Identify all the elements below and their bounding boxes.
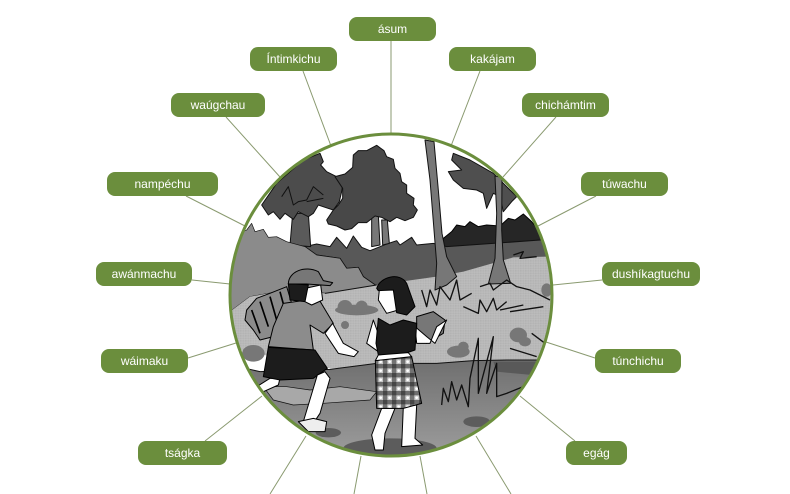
label: ásum xyxy=(349,17,436,41)
label: túnchichu: túnchichu xyxy=(612,354,664,368)
label: ásum: ásum xyxy=(378,22,407,36)
backpack bundle xyxy=(245,287,292,340)
label: waúgchau xyxy=(171,93,265,117)
circle outline xyxy=(230,134,552,456)
hair xyxy=(288,283,308,302)
connector lines xyxy=(186,41,602,494)
dark grass band xyxy=(305,236,550,288)
label: nampéchu xyxy=(107,172,218,196)
label: waúgchau: waúgchau xyxy=(191,98,245,112)
label: Íntimkichu: Íntimkichu xyxy=(266,52,321,66)
waistband xyxy=(375,353,412,361)
face xyxy=(305,285,323,305)
label: dushíkagtuchu xyxy=(602,262,700,286)
palm trunk xyxy=(488,176,511,284)
speckled ground xyxy=(232,256,550,368)
hill xyxy=(232,223,374,310)
label: túwachu: túwachu xyxy=(602,177,647,191)
left tree trunk xyxy=(290,213,311,247)
label: tságka: tságka xyxy=(165,446,200,460)
label: tságka xyxy=(138,441,227,465)
back leg xyxy=(257,378,280,392)
label: kakájam xyxy=(449,47,536,71)
shirt xyxy=(268,298,333,350)
hair xyxy=(377,277,415,315)
skirt xyxy=(375,357,422,408)
shorts xyxy=(263,347,327,380)
face xyxy=(378,290,396,314)
reeds xyxy=(442,333,545,407)
label: egág xyxy=(566,441,627,465)
label: nampéchu: nampéchu xyxy=(134,177,191,191)
label: chichámtim xyxy=(522,93,609,117)
path shadows xyxy=(316,416,490,458)
left tree xyxy=(262,153,343,219)
label: dushíkagtuchu: dushíkagtuchu xyxy=(612,267,690,281)
label: wáimaku: wáimaku xyxy=(121,354,168,368)
far bushes xyxy=(443,214,540,246)
arms xyxy=(367,320,447,352)
man xyxy=(245,269,358,432)
label: túnchichu xyxy=(595,349,681,373)
label: kakájam: kakájam xyxy=(470,52,515,66)
palm tree crown xyxy=(448,153,517,212)
cap xyxy=(288,269,333,286)
middle tree trunk xyxy=(372,215,389,247)
lower path xyxy=(250,360,537,448)
front leg xyxy=(303,372,330,423)
top xyxy=(376,318,417,355)
label: wáimaku xyxy=(101,349,188,373)
woman xyxy=(367,277,447,450)
shoe xyxy=(298,418,327,432)
tufts on ground xyxy=(422,252,550,313)
label: túwachu xyxy=(581,172,668,196)
bundle carried xyxy=(417,312,445,343)
label: chichámtim: chichámtim xyxy=(535,98,596,112)
legs xyxy=(372,405,423,450)
label: awánmachu xyxy=(96,262,192,286)
circular scene xyxy=(232,140,550,454)
arm xyxy=(325,323,358,357)
label: Íntimkichu xyxy=(250,47,337,71)
grey shrubs xyxy=(242,283,552,362)
tall tree xyxy=(425,140,457,290)
middle tree xyxy=(327,145,417,230)
label: awánmachu: awánmachu xyxy=(112,267,176,281)
label: egág: egág xyxy=(583,446,610,460)
illustration with connector lines xyxy=(186,41,602,494)
